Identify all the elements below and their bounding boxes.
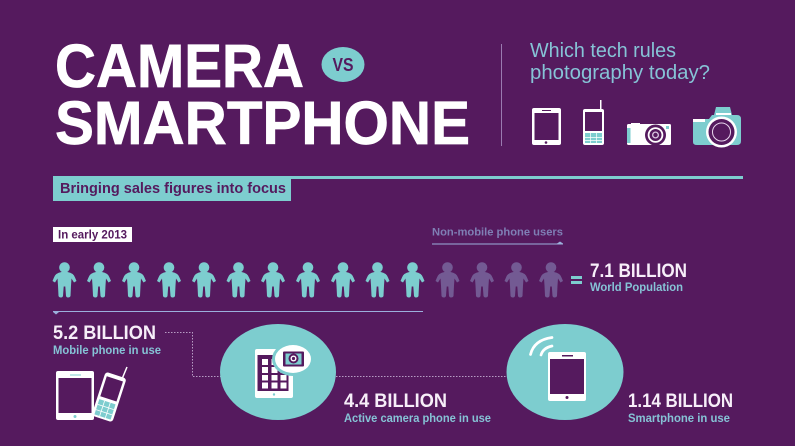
stat: 1.14 billion: Smartphone in use: [628, 413, 730, 425]
non-mobile label: [432, 226, 563, 244]
world population: [590, 261, 687, 294]
section heading: [53, 177, 291, 201]
circle: camera phone: [220, 324, 336, 420]
world population: World Population: [590, 282, 683, 294]
date label: In early 2013: [58, 230, 127, 242]
circle: smartphone: [506, 324, 624, 420]
stat: 4.4 billion: Active camera phone in use: [344, 413, 491, 425]
non-mobile label: Non-mobile phone users: [432, 226, 563, 238]
equals sign: [571, 276, 582, 284]
icon: mobile phone: [583, 100, 604, 145]
icon: smartphone: [548, 352, 586, 401]
mobile users bracket line: [53, 311, 423, 314]
icon: tablet and phone: [56, 367, 127, 422]
stat: 1.14 billion: 1.14 BILLION: [628, 391, 733, 412]
people row: non-mobile users: [436, 262, 563, 298]
dotted connector: [165, 332, 507, 376]
stat: 5.2 billion: [53, 323, 161, 357]
subtitle: Which tech rules: [530, 40, 676, 62]
stat: 4.4 billion: 4.4 BILLION: [344, 391, 447, 412]
stat: 5.2 billion: 5.2 BILLION: [53, 323, 156, 344]
stat: 1.14 billion: [628, 391, 733, 425]
icon: signal waves: [530, 338, 552, 355]
title: [55, 32, 470, 157]
stat: 4.4 billion: [344, 391, 491, 425]
subtitle: photography today?: [530, 62, 710, 84]
vs badge: [322, 47, 364, 82]
icon: compact camera: [627, 123, 671, 146]
icon: tablet: [532, 108, 561, 145]
icon: dslr camera: [693, 107, 741, 148]
vs badge: VS: [332, 55, 354, 75]
subtitle: [530, 40, 710, 84]
section rule: [53, 176, 743, 179]
section heading: Bringing sales figures into focus: [60, 181, 286, 197]
icon: tablet with camera: [255, 342, 314, 398]
divider: [501, 44, 502, 146]
world population: 7.1 BILLION: [590, 261, 687, 282]
title: CAMERA: [55, 32, 304, 100]
stat: 5.2 billion: Mobile phone in use: [53, 345, 161, 357]
people row: mobile users: [52, 262, 424, 298]
date label: [53, 227, 132, 242]
title: SMARTPHONE: [55, 89, 470, 157]
